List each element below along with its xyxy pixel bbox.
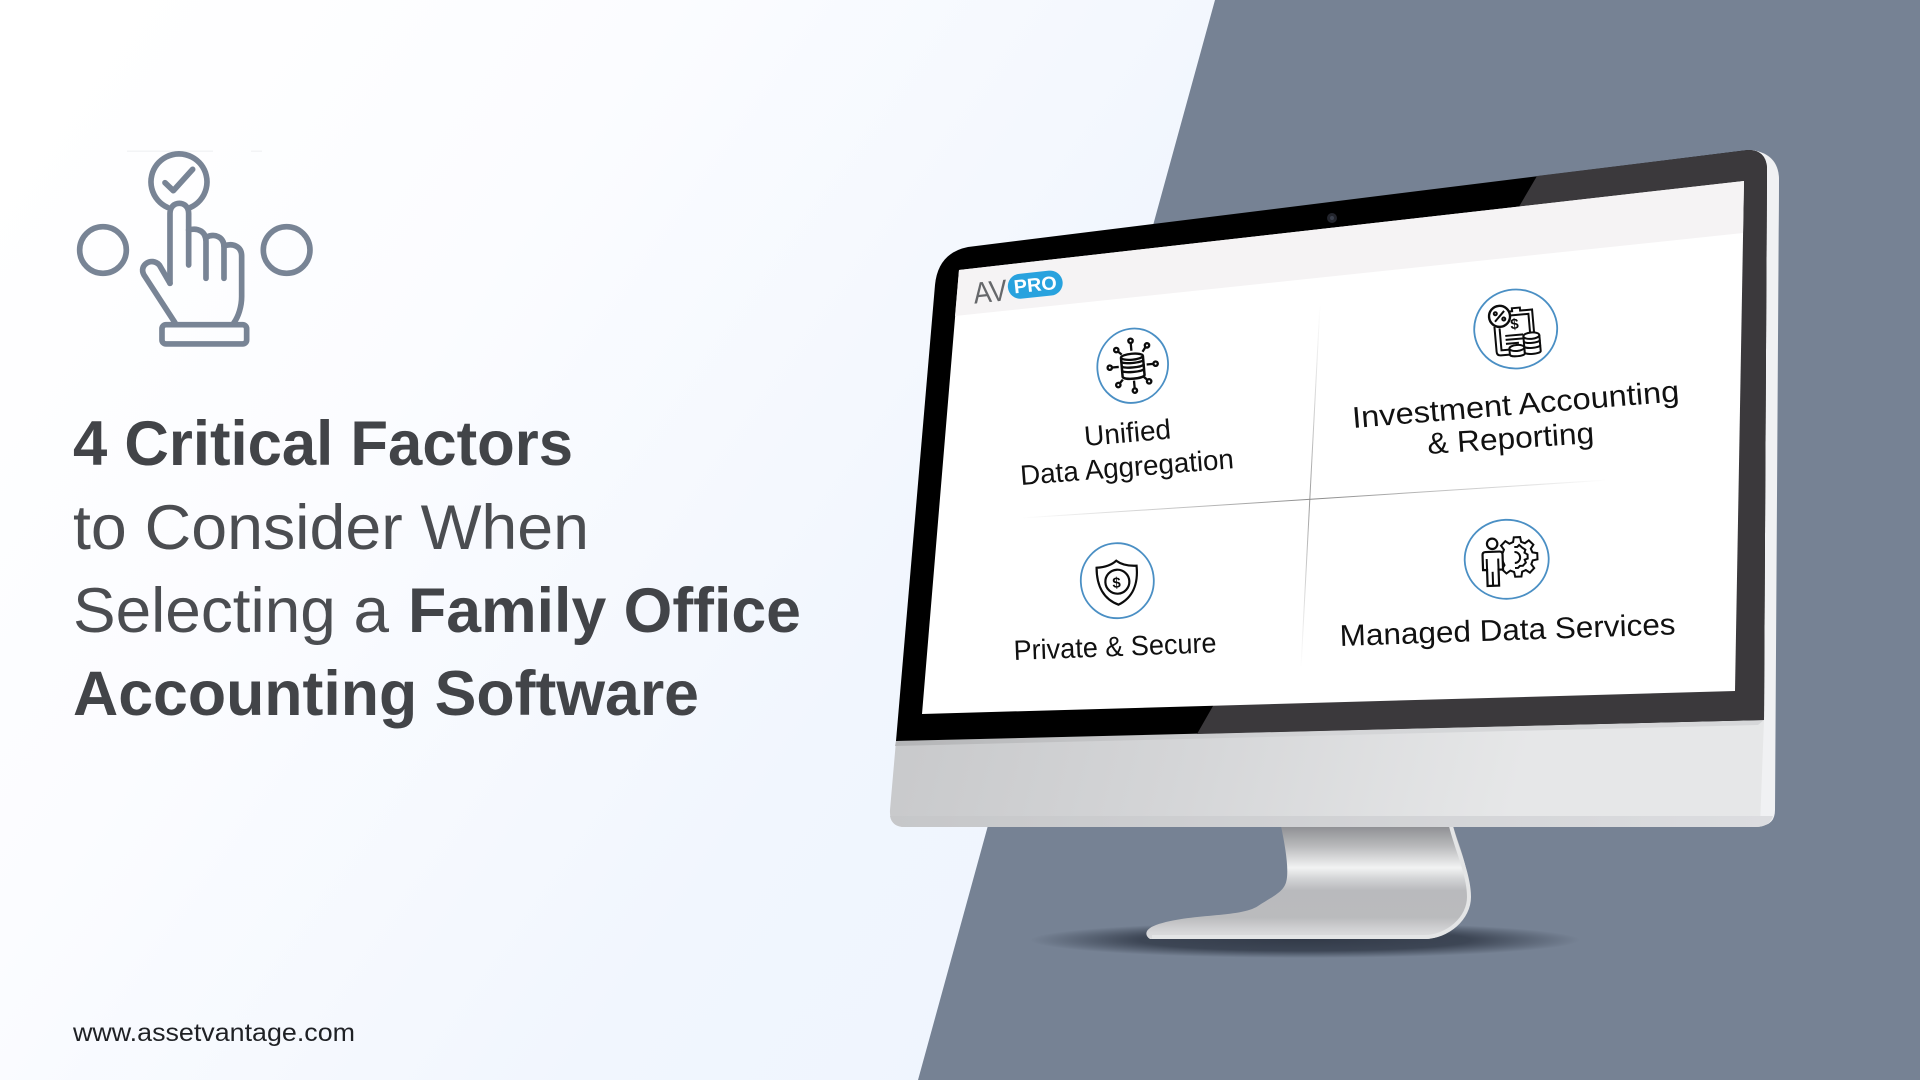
icon: shield with dollar: $ — [1112, 574, 1122, 592]
icon: person with gear — [1463, 518, 1550, 600]
dark bezel sheen — [1197, 150, 1767, 734]
monitor shadow — [1030, 922, 1580, 958]
factor: private and secure — [1013, 541, 1217, 666]
monitor body — [890, 150, 1779, 827]
title line 3 — [73, 576, 801, 646]
label: Investment Accounting: Investment Accounting — [1351, 375, 1680, 435]
icon: clipboard with coins — [1471, 286, 1560, 372]
black bezel — [896, 150, 1767, 741]
title line 4: Accounting Software — [73, 659, 699, 729]
icon: clipboard with coins: $ — [1510, 316, 1520, 333]
screen — [922, 181, 1744, 714]
title — [73, 409, 801, 729]
label: & Reporting: & Reporting — [1426, 417, 1595, 461]
icon: database network — [1094, 324, 1171, 408]
label: Managed Data Services: Managed Data Services — [1339, 608, 1676, 653]
factor: managed data services — [1339, 518, 1676, 653]
label: Data Aggregation: Data Aggregation — [1019, 443, 1235, 491]
logo: AV PRO: AV — [972, 274, 1009, 311]
slate diagonal panel — [918, 0, 1920, 1080]
label: Private & Secure: Private & Secure — [1013, 627, 1217, 666]
title line 3: Family Office — [408, 576, 801, 646]
webcam — [1327, 213, 1337, 223]
title line 1: 4 Critical Factors — [73, 409, 573, 479]
factor: investment accounting and reporting — [1351, 286, 1680, 461]
label: Unified: Unified — [1083, 414, 1172, 452]
logo: AV PRO: PRO — [1013, 273, 1058, 298]
bezel reflection line — [895, 720, 1764, 746]
screen grid lines — [1021, 304, 1608, 668]
factor: unified data aggregation — [1019, 324, 1235, 491]
logo: AV PRO — [972, 268, 1065, 311]
website url: www.assetvantage.com — [72, 1019, 355, 1047]
screen header band — [955, 181, 1744, 316]
monitor — [890, 150, 1779, 958]
bottom lip of body — [890, 816, 1773, 827]
monitor stand — [1146, 826, 1470, 939]
icon: shield with dollar — [1079, 541, 1156, 620]
icon: hand selecting a checked option — [80, 154, 310, 344]
title line 2: to Consider When — [73, 493, 589, 563]
title line 3: Selecting a — [73, 576, 390, 646]
right silver edge — [1748, 150, 1779, 826]
